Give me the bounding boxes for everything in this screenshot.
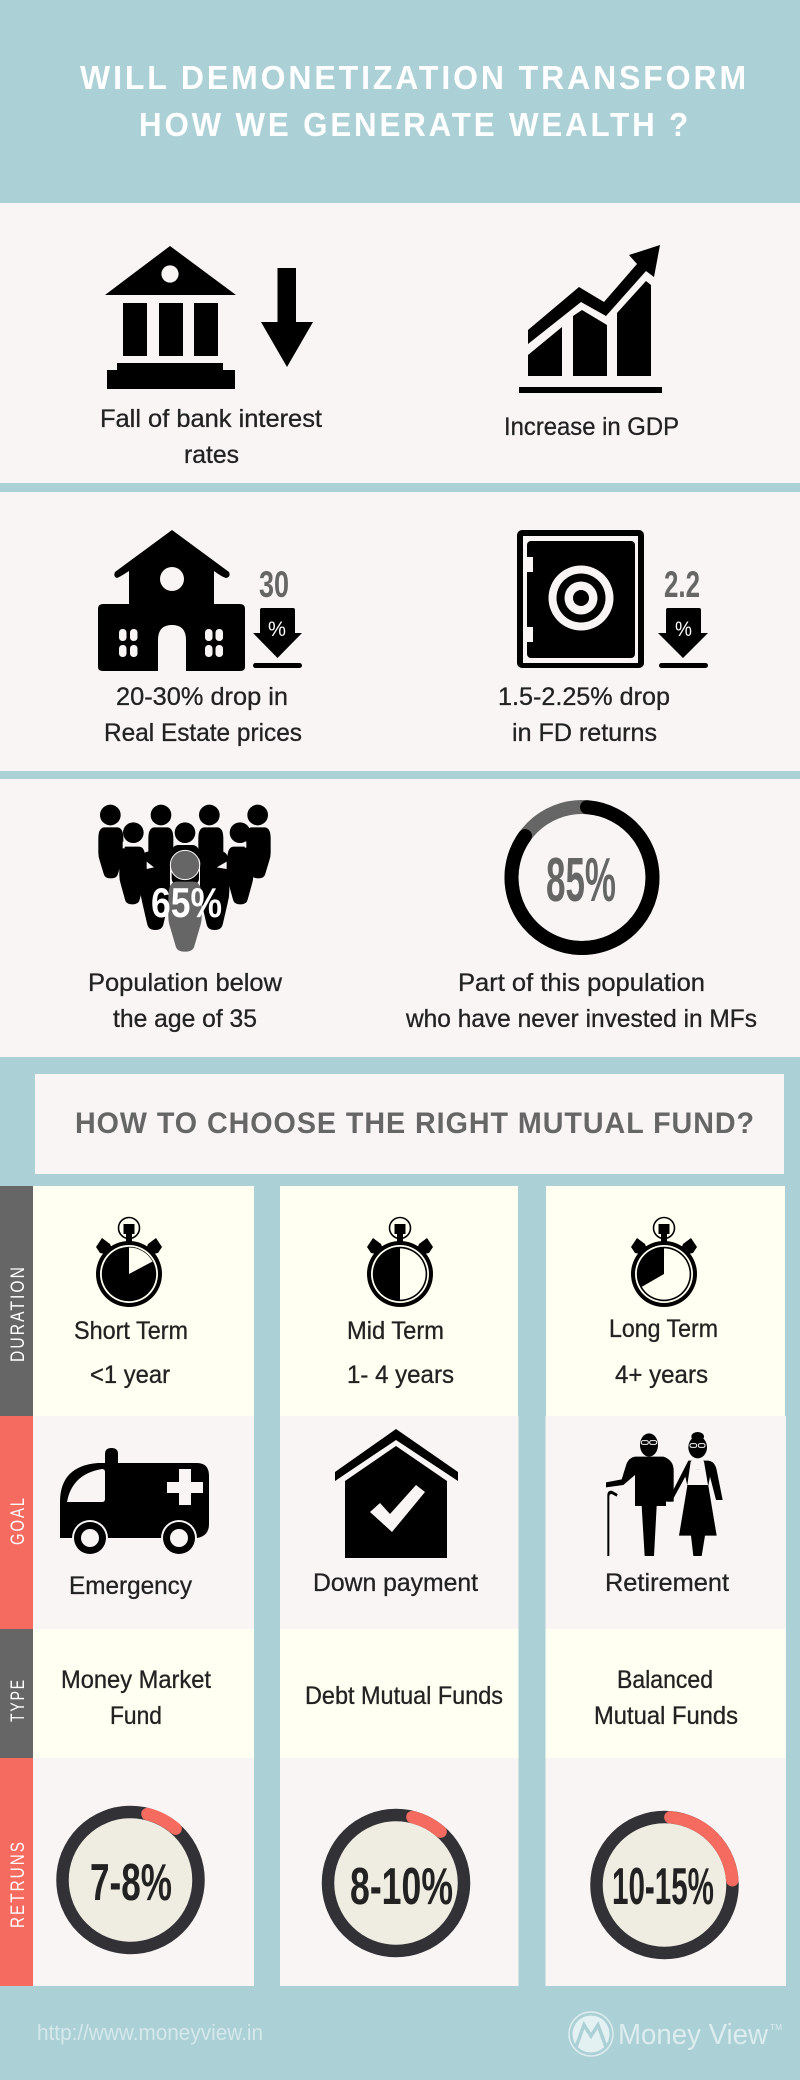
text: never invested [405, 969, 757, 1033]
title [80, 59, 749, 143]
text: never invested: Part of this population [458, 969, 705, 997]
text: FD drop: 1.5-2.25% drop [498, 683, 670, 711]
icon: ambulance [60, 1448, 209, 1556]
text: mid term: Mid Term [347, 1317, 444, 1345]
icon: house [98, 530, 245, 671]
text: down payment: Down payment [313, 1569, 478, 1597]
text: long term [609, 1315, 718, 1389]
logo: money view: Money View [618, 2019, 769, 2051]
text: mid term: 1- 4 years [347, 1361, 454, 1389]
title: HOW WE GENERATE WEALTH ? [139, 106, 691, 143]
text: never invested: who have never invested in MFs [405, 1005, 757, 1033]
text: fall of bank interest rates: Fall of bank interest [100, 405, 322, 433]
text: FD drop [498, 683, 670, 747]
text: emergency: Emergency [69, 1572, 192, 1600]
panel: price drops [0, 492, 800, 771]
label: type: TYPE [8, 1678, 29, 1722]
text: fall of bank interest rates: rates [184, 441, 239, 469]
text: short term: Short Term [74, 1317, 188, 1345]
text: increase in GDP: Increase in GDP [504, 413, 679, 441]
gauge: 7-8% [62, 1812, 198, 1948]
icon: percent down arrow 30 [253, 608, 302, 668]
text: mid term [347, 1317, 454, 1389]
text: balanced mutual funds: Mutual Funds [594, 1702, 738, 1730]
gauge: 10-15%: 10-15% [612, 1858, 714, 1916]
label: duration: DURATION [8, 1265, 29, 1362]
row: type [0, 1629, 786, 1758]
stat: 30: 30 [259, 564, 289, 605]
text: money market fund: Money Market [61, 1666, 211, 1694]
icon: bank [105, 246, 236, 389]
panel: economy effects [0, 203, 800, 483]
text: FD drop: in FD returns [512, 719, 657, 747]
icon: rising GDP chart [519, 245, 662, 393]
icon: percent down arrow 30: % [268, 618, 286, 641]
icon: crowd with 65% [98, 805, 271, 952]
text: short term [74, 1317, 188, 1389]
text: fall of bank interest rates [100, 405, 322, 469]
label: goal: GOAL [8, 1496, 29, 1545]
logo: money view: TM [770, 2023, 782, 2032]
panel: population [0, 779, 800, 1057]
gauge: 8-10%: 8-10% [350, 1858, 453, 1916]
row: duration [0, 1186, 785, 1416]
chart: 85% donut [511, 807, 652, 948]
footer url: http://www.moneyview.in [37, 2020, 263, 2045]
text: population below 35: Population below [88, 969, 283, 997]
chart: 85% donut: 85% [546, 846, 616, 915]
icon: percent down arrow 2.2 [658, 608, 708, 668]
stat: 2.2: 2.2 [664, 564, 700, 605]
text: population below 35 [88, 969, 283, 1033]
heading: how to choose [35, 1074, 784, 1174]
icon: stopwatch long [631, 1218, 697, 1307]
text: debt mutual funds: Debt Mutual Funds [305, 1682, 503, 1710]
text: money market fund: Fund [110, 1702, 162, 1730]
text: population below 35: the age of 35 [113, 1005, 257, 1033]
text: balanced mutual funds [594, 1666, 738, 1730]
row: goal [0, 1416, 786, 1629]
icon: stopwatch short [96, 1218, 162, 1307]
icon: down arrow [261, 268, 313, 367]
title: WILL DEMONETIZATION TRANSFORM [80, 59, 749, 96]
text: long term: Long Term [609, 1315, 718, 1343]
text: real estate drop: 20-30% drop in [116, 683, 288, 711]
gauge: 7-8%: 7-8% [90, 1854, 172, 1912]
icon: crowd with 65%: 65% [151, 879, 222, 926]
icon: stopwatch mid [367, 1218, 433, 1307]
label: returns: RETRUNS [8, 1840, 29, 1928]
gauge: 10-15% [596, 1817, 732, 1953]
icon: house with check [335, 1429, 458, 1558]
row: returns [0, 1758, 786, 1986]
gauge: 8-10% [328, 1815, 464, 1951]
icon: safe [517, 530, 644, 668]
icon: retired couple [605, 1432, 723, 1556]
text: retirement: Retirement [605, 1569, 729, 1597]
text: long term: 4+ years [615, 1361, 708, 1389]
text: real estate drop: Real Estate prices [104, 719, 302, 747]
text: short term: <1 year [90, 1361, 170, 1389]
text: balanced mutual funds: Balanced [617, 1666, 713, 1694]
text: real estate drop [104, 683, 302, 747]
logo: money view [569, 2012, 782, 2056]
heading: how to choose: HOW TO CHOOSE THE RIGHT MUTUAL FUND? [75, 1107, 755, 1140]
text: money market fund [61, 1666, 211, 1730]
icon: percent down arrow 2.2: % [675, 618, 692, 641]
